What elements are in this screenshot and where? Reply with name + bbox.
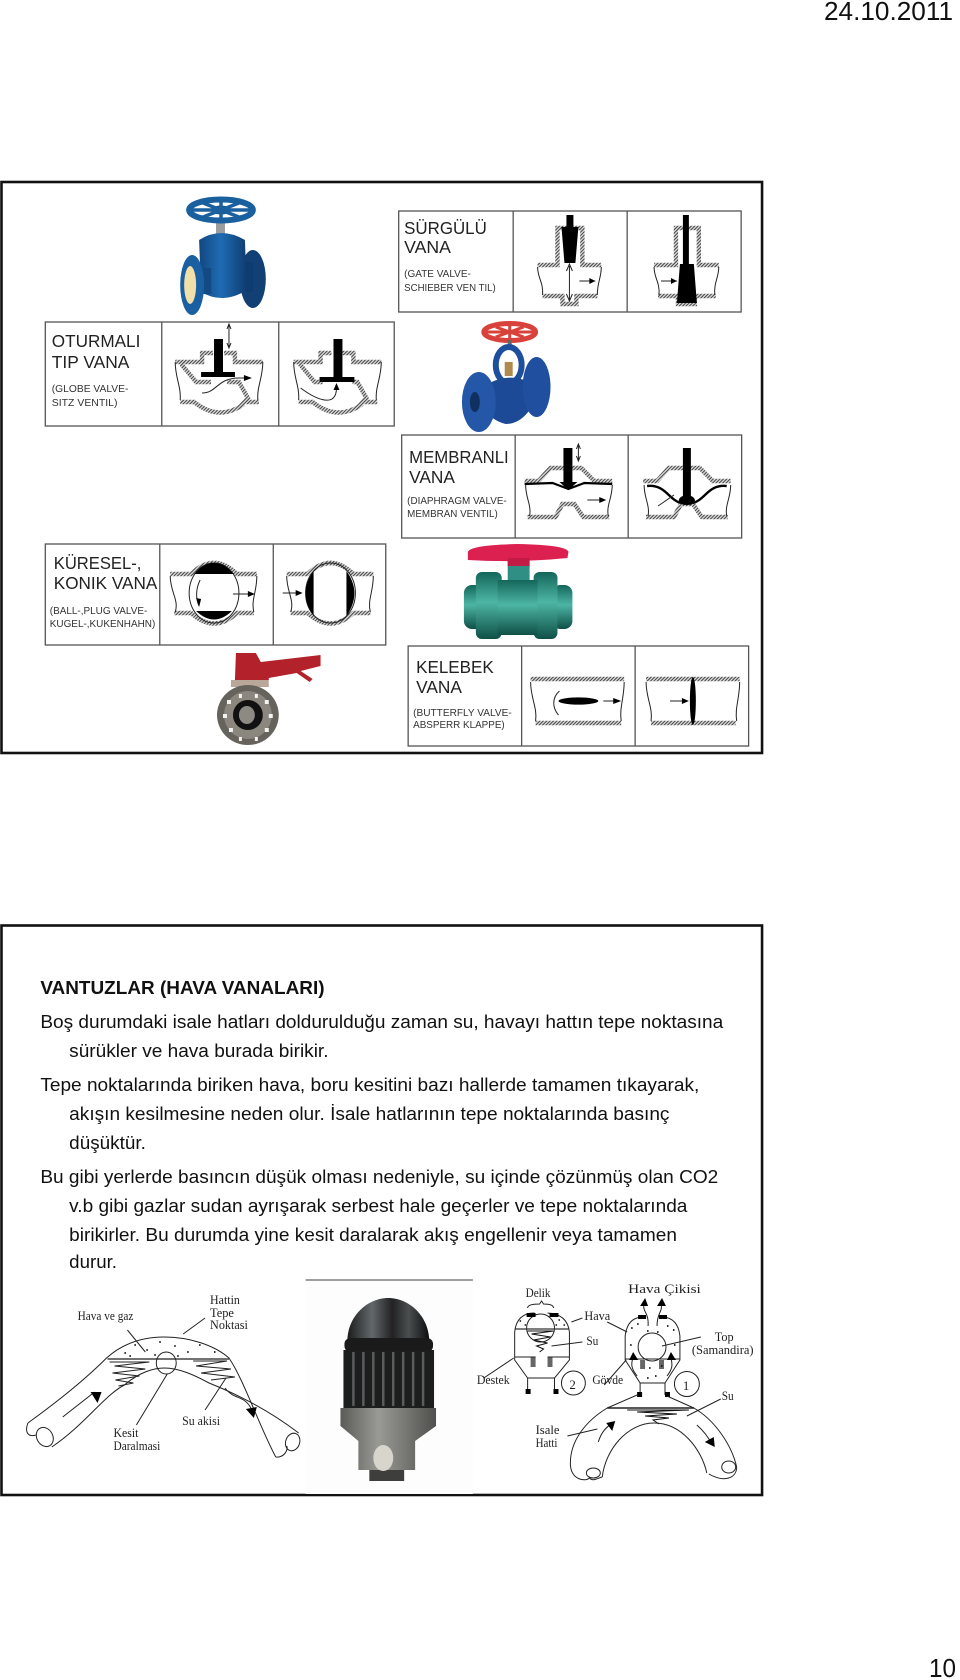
valve state 1 <box>592 1281 754 1397</box>
text block: body paragraphs: akışın kesilmesine neden olur. İsale hatlarının tepe noktalarında basınç <box>69 1103 669 1124</box>
diagram: air collection in pipeline crest: Hattin <box>210 1292 240 1307</box>
label: küresel konik vana: KUGEL-,KUKENHAHN) <box>50 619 155 630</box>
label: sürgülü vana: SCHIEBER VEN TIL) <box>404 283 496 294</box>
label: membranlı vana: MEMBRANLI <box>409 447 509 467</box>
photo: red butterfly valve <box>217 653 321 745</box>
label: oturmalı tip vana: TIP VANA <box>52 352 129 372</box>
photo: air valve <box>306 1280 473 1494</box>
photo: blue gate valve <box>180 200 266 315</box>
label: kelebek vana <box>413 657 512 731</box>
valve state 2: Destek <box>477 1372 510 1387</box>
slide frame <box>1 182 762 753</box>
diagram: diaphragm closed <box>643 448 731 517</box>
valve state 2: 2 <box>569 1377 576 1392</box>
text block: body paragraphs: birikirler. Bu durumda yine kesit daralarak akış engellenir veya tamamen <box>69 1224 677 1245</box>
panel: vantuzlar slide <box>1 926 762 1495</box>
leader lines <box>127 1318 226 1425</box>
label: oturmalı tip vana: SITZ VENTIL) <box>52 398 117 409</box>
table: kelebek vana <box>408 646 749 746</box>
label: membranlı vana: (DIAPHRAGM VALVE- <box>407 496 507 507</box>
valve state 1: Top <box>715 1329 734 1344</box>
text block: body paragraphs: v.b gibi gazlar sudan ayrışarak serbest hale geçerler ve tepe noktalarında <box>69 1195 688 1216</box>
valve state 1: Hava Çikisi <box>628 1281 701 1296</box>
text block: body paragraphs: düşüktür. <box>69 1132 146 1153</box>
diagram: globe open <box>175 324 263 413</box>
diagram: ball open <box>170 563 257 624</box>
label: kelebek vana: VANA <box>416 677 462 697</box>
label: membranlı vana <box>407 447 509 520</box>
label: küresel konik vana: (BALL-,PLUG VALVE- <box>50 606 147 617</box>
label: sürgülü vana: (GATE VALVE- <box>404 269 471 280</box>
text block: body paragraphs: Boş durumdaki isale hatları doldurulduğu zaman su, havayı hattın tepe noktasına <box>40 1011 724 1032</box>
diagram: air collection in pipeline crest: Noktasi <box>210 1317 248 1332</box>
flow arrows <box>63 1388 251 1417</box>
table: membranlı vana <box>402 435 742 538</box>
diagram: air valve cross sections <box>477 1281 754 1480</box>
water ripples <box>110 1361 235 1386</box>
label: kelebek vana: ABSPERR KLAPPE) <box>413 720 505 731</box>
diagram: gate closed <box>654 215 719 304</box>
valve state 1: Gövde <box>592 1372 623 1387</box>
supply pipe arch: Isale <box>536 1422 560 1437</box>
supply pipe arch: Su <box>722 1388 734 1403</box>
diagram: gate open <box>538 215 601 304</box>
label: küresel konik vana: KONIK VANA <box>54 573 157 593</box>
label: kelebek vana: (BUTTERFLY VALVE- <box>413 708 512 719</box>
label: küresel konik vana: KÜRESEL-, <box>54 553 141 573</box>
diagram: air collection in pipeline crest <box>27 1292 302 1457</box>
valve state 2: Su <box>586 1333 599 1348</box>
diagram: air collection in pipeline crest: Su akisi <box>182 1413 220 1428</box>
photo: red wheel globe valve <box>462 323 551 432</box>
label: sürgülü vana <box>404 218 496 294</box>
table: küresel konik vana <box>45 544 386 645</box>
text block: body paragraphs <box>40 1011 724 1272</box>
diagram: globe closed <box>294 339 381 413</box>
heading: vantuzlar: VANTUZLAR (HAVA VANALARI) <box>40 977 325 998</box>
diagram: air collection in pipeline crest: Tepe <box>210 1305 234 1320</box>
table: sürgülü vana <box>399 211 741 312</box>
diagram: ball closed <box>283 563 373 624</box>
diagram: air collection in pipeline crest: Hava ve gaz <box>78 1308 134 1323</box>
valve state 2 <box>477 1285 610 1395</box>
slide frame <box>1 926 762 1495</box>
text block: body paragraphs: Bu gibi yerlerde basıncın düşük olması nedeniyle, su içinde çözünmüş olan CO2 <box>40 1166 718 1187</box>
valve state 1: (Samandira) <box>692 1342 754 1357</box>
valve state 2: Hava <box>584 1308 610 1323</box>
label: oturmalı tip vana: (GLOBE VALVE- <box>52 384 128 395</box>
label: küresel konik vana <box>50 553 157 630</box>
diagram: butterfly closed <box>646 677 740 725</box>
panel: valve types slide <box>1 182 762 753</box>
photo: teal ball valve <box>464 544 572 639</box>
diagram: air collection in pipeline crest: Daralmasi <box>113 1438 161 1453</box>
supply pipe arch <box>536 1388 737 1480</box>
label: membranlı vana: MEMBRAN VENTIL) <box>407 509 498 520</box>
label: kelebek vana: KELEBEK <box>416 657 494 677</box>
text block: body paragraphs: durur. <box>69 1251 117 1272</box>
text block: body paragraphs: Tepe noktalarında biriken hava, boru kesitini bazı hallerde tamamen tıkayarak, <box>40 1074 699 1095</box>
label: oturmalı tip vana: OTURMALI <box>52 331 140 351</box>
table: oturmalı tip vana <box>45 322 394 426</box>
diagram: butterfly open <box>531 679 624 723</box>
valve state 1: 1 <box>683 1378 689 1393</box>
text block: body paragraphs: sürükler ve hava burada birikir. <box>69 1040 329 1061</box>
label: sürgülü vana: VANA <box>404 237 451 257</box>
label: sürgülü vana: SÜRGÜLÜ <box>404 218 487 238</box>
diagram: air collection in pipeline crest: Kesit <box>113 1425 139 1440</box>
diagram: diaphragm open <box>525 444 612 517</box>
label: membranlı vana: VANA <box>409 467 455 487</box>
air bubbles <box>124 1342 216 1356</box>
valve state 2: Delik <box>526 1285 551 1300</box>
supply pipe arch: Hatti <box>536 1435 558 1450</box>
label: oturmalı tip vana <box>52 331 140 409</box>
